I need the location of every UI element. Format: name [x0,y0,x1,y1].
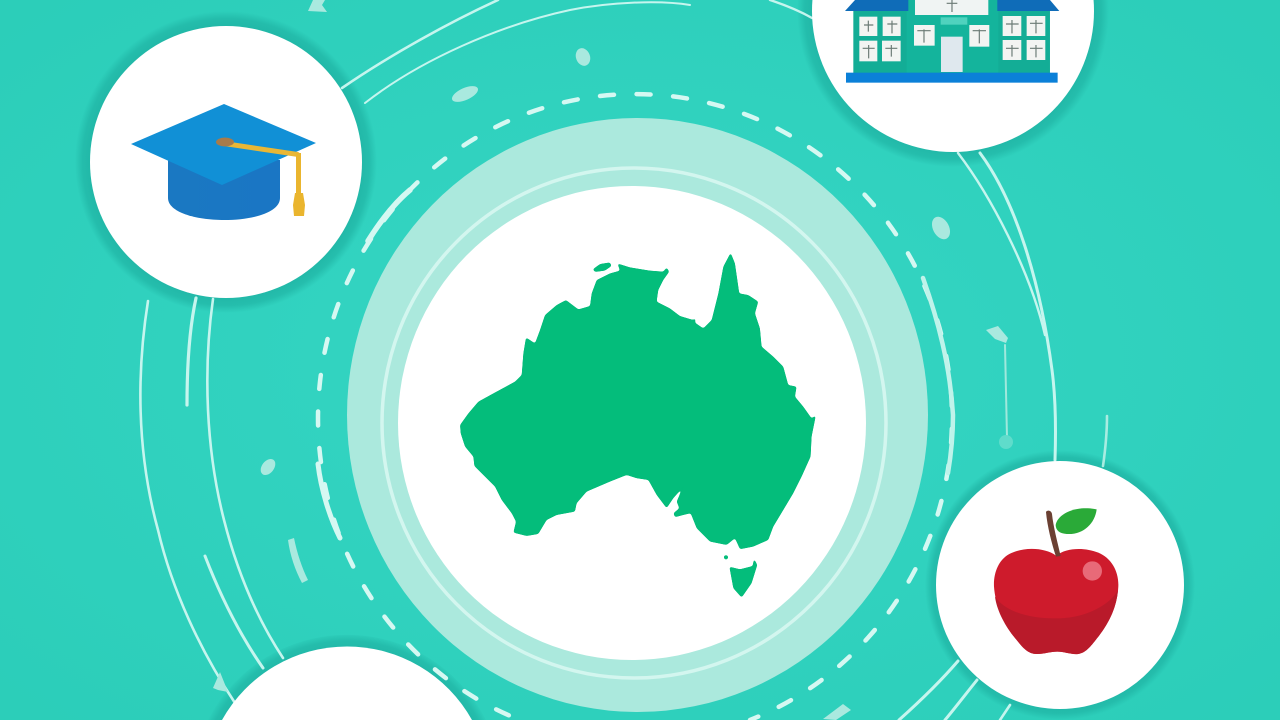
circle: graduation cap [90,26,362,298]
orbit lines [140,0,1107,720]
dashed orbit [318,94,953,720]
map: Tasmania [729,558,757,598]
circle: bottom [222,646,472,720]
icon: school building [845,0,1059,83]
map of Australia [460,253,816,598]
icon: graduation cap [131,104,316,220]
floating marks [213,0,1013,720]
icon: apple [994,508,1118,654]
central ring [347,118,928,712]
circle: school [812,0,1094,152]
circle: apple [936,461,1184,709]
central white disc [398,186,866,660]
